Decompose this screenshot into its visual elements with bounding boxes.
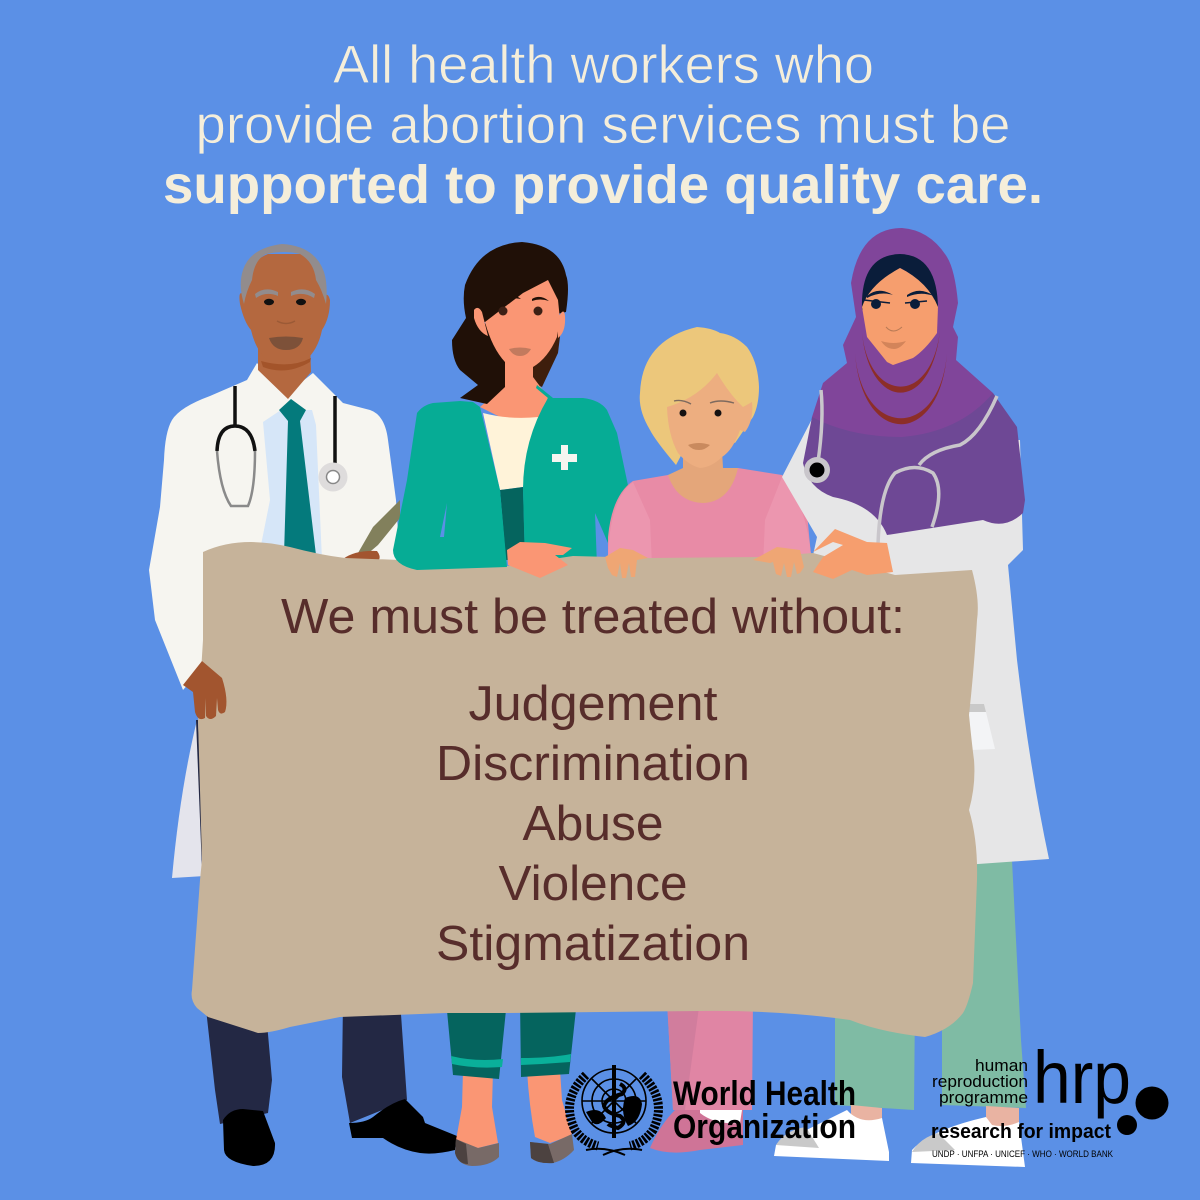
logo: hrp: [931, 1036, 1168, 1160]
blonde woman's hands: [605, 547, 804, 578]
jacket right side: [523, 385, 630, 566]
doctor's hand: [813, 529, 893, 579]
shoe: [650, 1110, 743, 1153]
coat: [149, 363, 400, 690]
shoes: [455, 1139, 499, 1166]
hijab folds: [855, 330, 947, 424]
hair: [452, 242, 568, 404]
cross: [552, 445, 577, 470]
shirt: [258, 410, 322, 560]
face: [485, 280, 560, 369]
face: [862, 268, 938, 365]
neck: [668, 450, 738, 503]
hijab head: [812, 228, 993, 437]
coat: [782, 417, 1049, 866]
figure: blonde woman: [608, 327, 812, 1153]
shoes: [223, 1099, 457, 1166]
wordmark: World Health: [673, 1075, 856, 1113]
neck and chest: [480, 345, 548, 422]
hrp dots: [1117, 1086, 1168, 1135]
face: [667, 373, 752, 468]
hands and sleeves resting on the banner: [183, 401, 893, 719]
banner list: Discrimination: [436, 737, 750, 791]
ears: [474, 308, 565, 338]
clipboard strap: [358, 500, 400, 556]
tagline: research for impact: [931, 1121, 1111, 1143]
top: [483, 413, 538, 490]
banner: [192, 542, 978, 1037]
face details: [871, 299, 881, 309]
shoes: [774, 1110, 889, 1161]
stethoscope: [818, 390, 997, 544]
shirt: [608, 468, 812, 566]
figure: female doctor in hijab: [774, 228, 1049, 1167]
hair: [862, 254, 938, 310]
programme name: reproduction: [932, 1072, 1028, 1091]
programme name: human: [975, 1056, 1028, 1075]
banner heading: We must be treated without:: [281, 590, 905, 644]
banner list: Violence: [498, 857, 688, 911]
logo: World Health Organization: [570, 1065, 856, 1155]
trousers: [667, 1000, 753, 1110]
lower coat: [172, 720, 205, 878]
emblem: [570, 1065, 658, 1155]
banner list: Abuse: [522, 797, 664, 851]
hair: [640, 327, 759, 465]
figure: male doctor: [149, 244, 457, 1166]
stethoscope: [217, 386, 335, 506]
face details: [255, 289, 315, 298]
programme name: programme: [939, 1088, 1028, 1107]
neck: [258, 340, 311, 399]
title: [163, 35, 1043, 215]
title: provide abortion services must be: [196, 95, 1010, 155]
banner list: [436, 677, 750, 971]
trousers: [835, 860, 1026, 1110]
trousers: [446, 1000, 577, 1079]
hrp letters: hrp: [1033, 1036, 1131, 1119]
hijab lower shawl: [803, 393, 1025, 535]
partners: UNDP · UNFPA · UNICEF · WHO · WORLD BANK: [932, 1149, 1114, 1160]
figure: female nurse: [446, 242, 630, 1166]
pocket: [968, 704, 995, 750]
face details: [498, 306, 508, 316]
banner list: Judgement: [468, 677, 718, 731]
title: supported to provide quality care.: [163, 155, 1043, 215]
wordmark: Organization: [673, 1108, 856, 1146]
ankles: [851, 1105, 1019, 1127]
face details: [680, 410, 686, 416]
banner list: Stigmatization: [436, 917, 750, 971]
head: [239, 254, 330, 366]
rear hair: [533, 320, 562, 387]
programme name: [932, 1056, 1028, 1107]
trousers: [205, 1000, 407, 1124]
man's hand: [183, 661, 226, 719]
tie: [279, 399, 316, 555]
legs: [456, 1070, 572, 1148]
nurse's jacket left side: [393, 401, 507, 570]
nurse's hand: [507, 542, 572, 578]
wordmark: [673, 1075, 856, 1146]
title: All health workers who: [333, 35, 874, 95]
